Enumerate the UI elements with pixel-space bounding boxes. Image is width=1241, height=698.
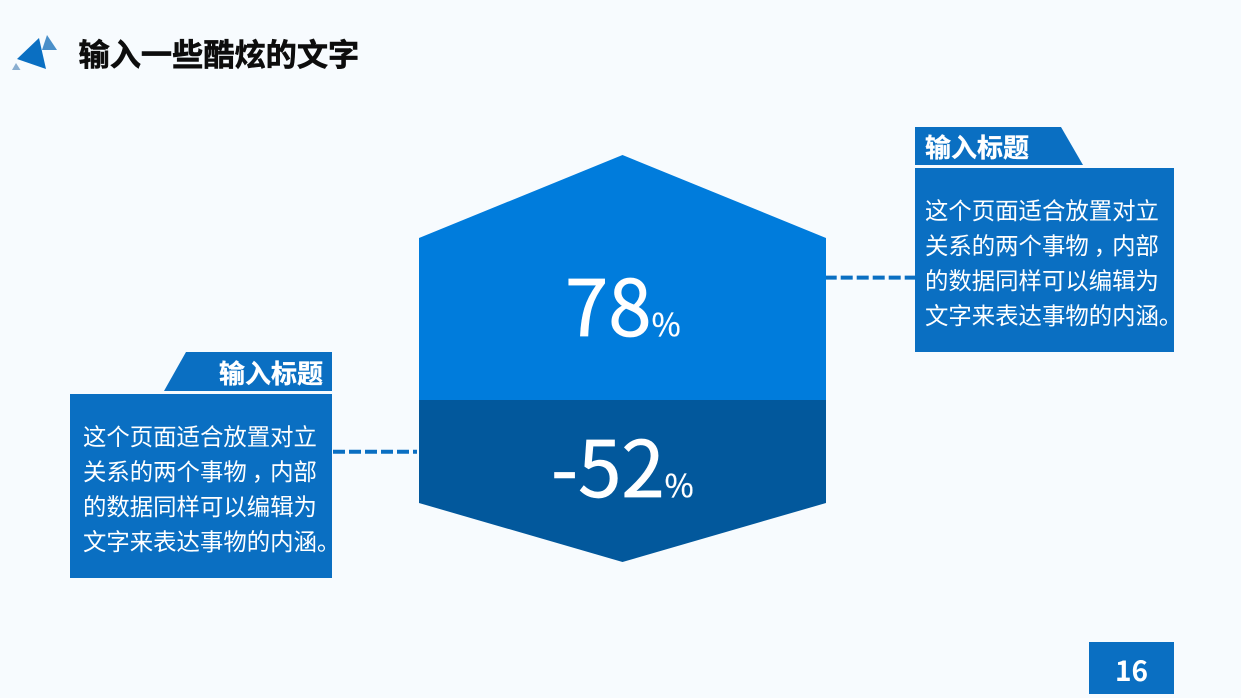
hexagon lower segment	[419, 400, 826, 562]
right body text: 的数据同样可以编辑为	[925, 262, 1159, 296]
connector: left dashed line	[333, 450, 417, 454]
page number: 16	[1115, 650, 1148, 690]
left heading tab	[164, 352, 332, 391]
right heading: 输入标题	[925, 128, 1029, 165]
hexagon upper segment	[419, 155, 826, 400]
right heading tab	[915, 127, 1083, 165]
connector: right dashed line	[826, 276, 915, 280]
right body text: 关系的两个事物，内部	[925, 227, 1159, 261]
right body box	[915, 168, 1174, 352]
left body text	[83, 418, 340, 557]
left body box	[70, 394, 332, 578]
left body text: 的数据同样可以编辑为	[83, 488, 317, 522]
left body text: 关系的两个事物，内部	[83, 453, 317, 487]
panel: left callout	[70, 352, 340, 578]
title: 输入一些酷炫的文字	[78, 30, 359, 75]
right body text	[925, 192, 1182, 331]
right body text: 文字来表达事物的内涵。	[925, 297, 1182, 331]
value: -52%: -52%	[551, 408, 694, 520]
page number	[1089, 642, 1174, 694]
panel: right callout	[915, 127, 1182, 352]
value: 78%: 78%	[565, 247, 681, 359]
left heading: 输入标题	[219, 354, 323, 391]
left body text: 文字来表达事物的内涵。	[83, 523, 340, 557]
right body text: 这个页面适合放置对立	[925, 192, 1159, 226]
hexagon chart	[419, 155, 826, 562]
left body text: 这个页面适合放置对立	[83, 418, 317, 452]
icon: triangles logo	[12, 35, 57, 70]
